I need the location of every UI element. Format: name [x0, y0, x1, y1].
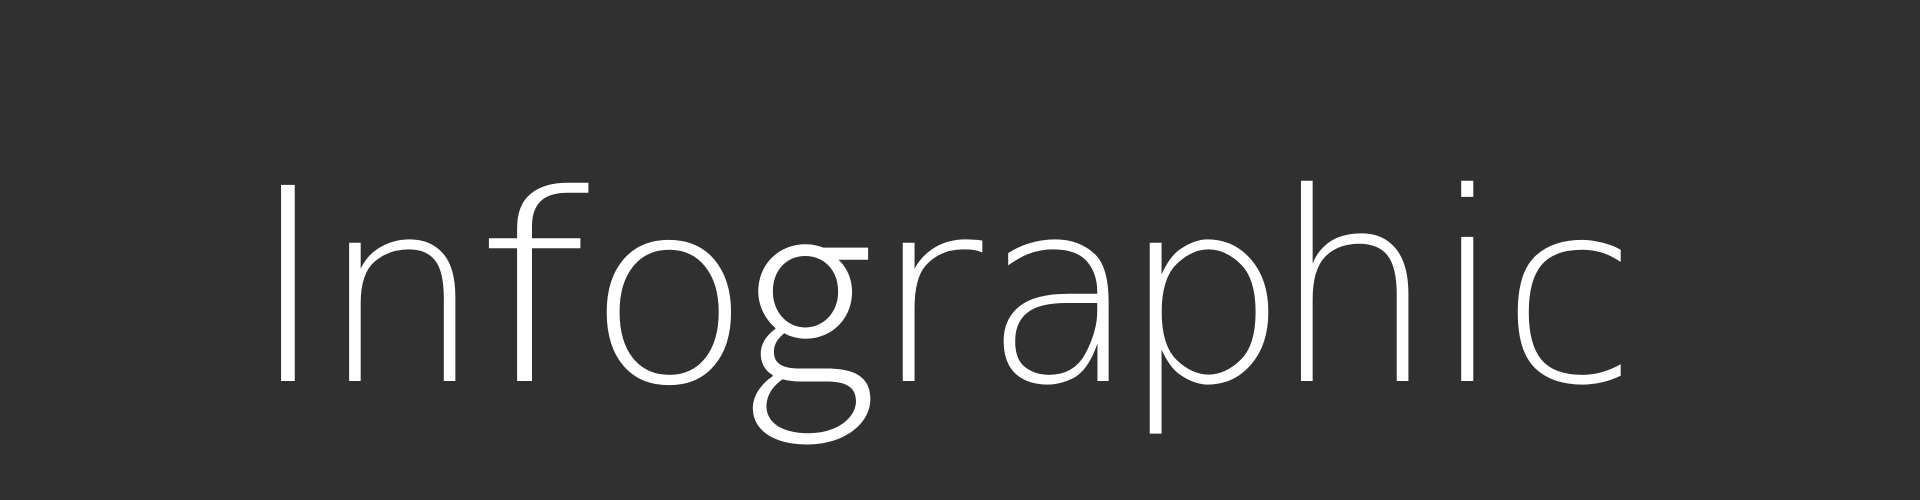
- title: p: [1119, 147, 1290, 441]
- title: [248, 92, 1636, 453]
- title: h: [1272, 136, 1436, 443]
- title: n: [320, 147, 483, 441]
- title: r: [872, 147, 985, 441]
- title: i: [1431, 137, 1506, 443]
- title: I: [248, 132, 328, 445]
- title: a: [983, 147, 1137, 441]
- title: f: [474, 139, 592, 443]
- title: o: [585, 148, 753, 441]
- title: g: [739, 92, 874, 453]
- title: c: [1501, 147, 1636, 441]
